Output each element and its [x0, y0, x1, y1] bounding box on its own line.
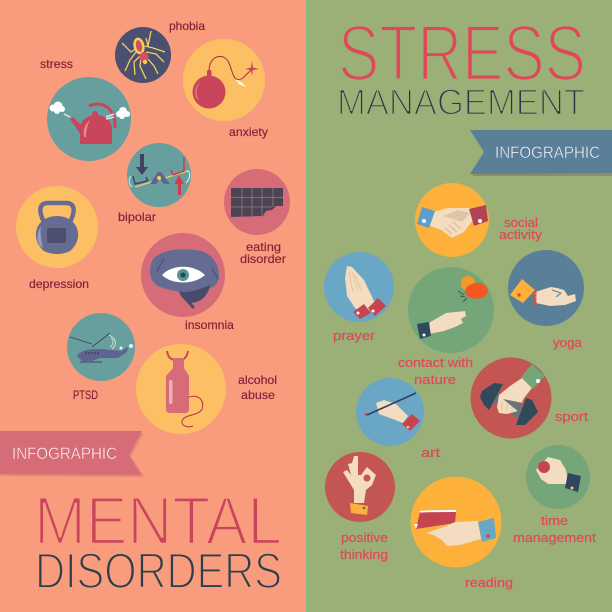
icon: bomb: [183, 39, 265, 121]
label: alcohol abuse: alcohol: [238, 373, 277, 387]
label: eating disorder: [240, 240, 286, 266]
panel: mental disorders background: [0, 0, 306, 612]
icon: spider: [115, 27, 171, 83]
label: alcohol abuse: [238, 373, 277, 402]
label: positive thinking: [340, 531, 388, 562]
label: time management: management: [513, 531, 597, 545]
ribbon: infographic left: [0, 431, 144, 477]
icon: kettlebell: [16, 186, 98, 268]
label: social activity: social: [504, 216, 538, 230]
title: mental: MENTAL: [34, 483, 282, 559]
icon: kettle: [47, 77, 131, 161]
ribbon: infographic right: INFOGRAPHIC: [495, 143, 600, 162]
icon: devil bottle: [136, 344, 226, 434]
label: social activity: [499, 216, 543, 242]
label: eating disorder: disorder: [240, 252, 286, 266]
label: bipolar: bipolar: [118, 210, 156, 224]
icon: praying hands: [324, 252, 394, 322]
icon: handshake: [415, 183, 489, 257]
icon: ok hand: [325, 452, 395, 522]
title: management: MANAGEMENT: [337, 82, 585, 122]
label: positive thinking: positive: [341, 531, 388, 545]
icon: hand with butterfly: [408, 267, 494, 353]
icon: seesaw: [127, 143, 191, 207]
label: positive thinking: thinking: [340, 548, 388, 562]
label: contact with nature: nature: [414, 373, 456, 387]
label: yoga: yoga: [553, 336, 582, 350]
ribbon: infographic left: INFOGRAPHIC: [12, 444, 117, 463]
icon: brain with eye: [141, 233, 225, 317]
panel edge strip: [306, 0, 310, 612]
title: disorders: DISORDERS: [35, 543, 282, 599]
icon: chocolate: [224, 169, 290, 235]
icon: hand with apple: [526, 445, 590, 509]
label: PTSD: PTSD: [73, 388, 98, 402]
panel: stress management background: [306, 0, 612, 612]
icon: yoga hand: [508, 250, 584, 326]
icon: hand with brush: [356, 378, 424, 446]
label: prayer: prayer: [333, 329, 375, 343]
label: eating disorder: eating: [246, 240, 281, 254]
label: depression: depression: [29, 277, 89, 291]
label: stress: stress: [40, 57, 73, 71]
label: social activity: activity: [499, 228, 543, 242]
label: contact with nature: [398, 356, 473, 387]
label: contact with nature: contact with: [398, 356, 473, 370]
label: reading: reading: [465, 576, 513, 590]
icon: hand with dumbbell: [470, 358, 552, 438]
ribbon: infographic right: [470, 130, 612, 176]
label: time management: time: [541, 514, 568, 528]
label: art: art: [421, 446, 441, 460]
label: alcohol abuse: abuse: [241, 388, 275, 402]
label: anxiety: anxiety: [229, 125, 268, 139]
label: insomnia: insomnia: [185, 318, 234, 332]
icon: helicopter: [67, 313, 135, 381]
icon: hand with book: [410, 476, 502, 568]
label: sport: sport: [555, 410, 589, 424]
label: phobia: phobia: [169, 19, 205, 33]
label: time management: [513, 514, 597, 545]
